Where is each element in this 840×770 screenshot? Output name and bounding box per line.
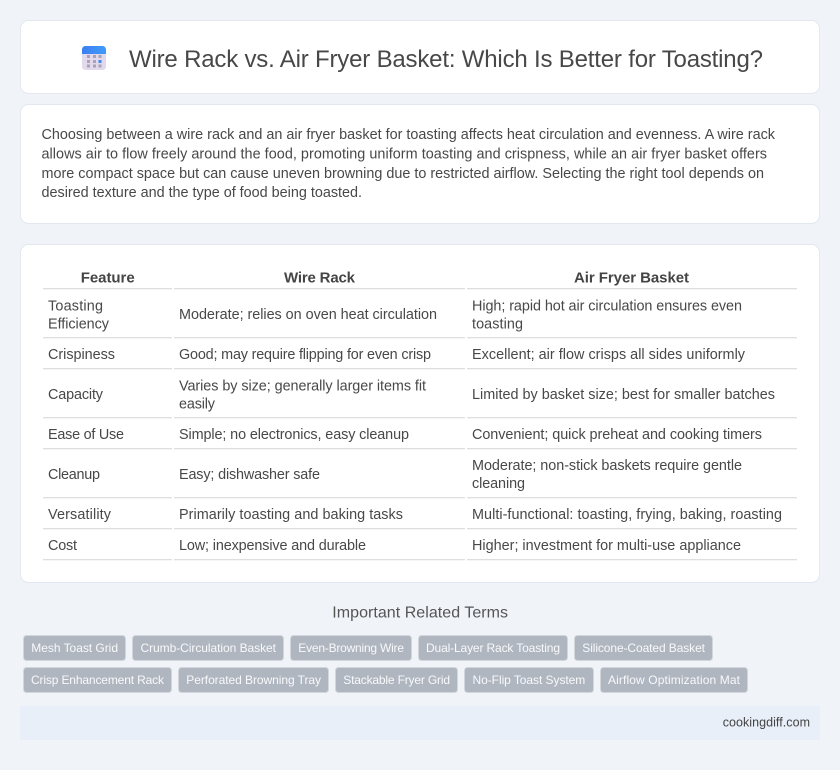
row: cleanup: cleaning bbox=[472, 476, 525, 492]
table header row: Wire Rack bbox=[284, 270, 356, 287]
row: capacity: Varies by size; generally larger items fit bbox=[179, 378, 426, 394]
tag: perforated browning tray: Perforated Browning Tray bbox=[186, 673, 321, 687]
tag: silicone-coated basket bbox=[574, 636, 712, 660]
row: cost bbox=[43, 538, 797, 560]
row: cost: Cost bbox=[48, 538, 77, 554]
row: versatility: Multi-functional: toasting, frying, baking, roasting bbox=[472, 507, 782, 523]
row: crispiness: Excellent; air flow crisps all sides uniformly bbox=[472, 347, 746, 363]
row: cleanup: Cleanup bbox=[48, 467, 100, 483]
tag: even-browning wire bbox=[290, 636, 412, 660]
related terms heading: Important Related Terms bbox=[332, 605, 508, 622]
tag: crisp enhancement rack bbox=[24, 668, 172, 692]
row: toasting efficiency bbox=[43, 298, 797, 338]
row: crispiness: Crispiness bbox=[48, 347, 115, 363]
related term tags bbox=[24, 636, 748, 692]
row: versatility: Primarily toasting and baking tasks bbox=[179, 507, 403, 523]
table header row bbox=[43, 270, 797, 289]
row: capacity: Capacity bbox=[48, 387, 104, 403]
intro text: Choosing between a wire rack and an air fryer basket for toasting affects heat circulation and evenness. A wire rack bbox=[42, 127, 776, 143]
row: ease of use: Simple; no electronics, easy cleanup bbox=[179, 427, 409, 443]
intro text: desired texture and the type of food being toasted. bbox=[42, 185, 362, 201]
row: crispiness bbox=[43, 347, 797, 369]
comparison table panel bbox=[20, 244, 820, 582]
footer bar bbox=[20, 706, 820, 740]
tag: mesh toast grid bbox=[24, 636, 126, 660]
table header row: Air Fryer Basket bbox=[574, 270, 689, 287]
row: capacity: Limited by basket size; best for smaller batches bbox=[472, 387, 775, 403]
intro text: more compact space but can cause uneven browning due to restricted airflow. Selecting the right tool depends on bbox=[42, 166, 764, 182]
intro paragraph panel bbox=[20, 104, 820, 224]
row: ease of use: Convenient; quick preheat and cooking timers bbox=[472, 427, 762, 443]
row: cleanup bbox=[43, 458, 797, 498]
icon: calendar grid bbox=[82, 46, 106, 70]
title: Wire Rack vs. Air Fryer Basket: Which Is Better for Toasting? bbox=[129, 46, 763, 73]
tag: dual-layer rack toasting bbox=[418, 636, 568, 660]
header panel bbox=[20, 20, 820, 94]
row: toasting efficiency: toasting bbox=[472, 316, 523, 332]
row: capacity: easily bbox=[179, 396, 216, 412]
tag: dual-layer rack toasting: Dual-Layer Rack Toasting bbox=[426, 641, 560, 655]
row: ease of use: Ease of Use bbox=[48, 427, 124, 443]
row: versatility: Versatility bbox=[48, 507, 112, 523]
row: toasting efficiency: High; rapid hot air circulation ensures even bbox=[472, 298, 742, 314]
tag: perforated browning tray bbox=[178, 668, 328, 692]
tag: crumb-circulation basket: Crumb-Circulation Basket bbox=[140, 641, 277, 655]
tag: no-flip toast system bbox=[464, 668, 594, 692]
tag: silicone-coated basket: Silicone-Coated Basket bbox=[582, 641, 706, 655]
tag: no-flip toast system: No-Flip Toast System bbox=[472, 673, 585, 687]
row: cost: Low; inexpensive and durable bbox=[179, 538, 366, 554]
row: crispiness: Good; may require flipping for even crisp bbox=[179, 347, 431, 363]
tag: crisp enhancement rack: Crisp Enhancement Rack bbox=[31, 673, 165, 687]
tag: crumb-circulation basket bbox=[132, 636, 284, 660]
row: cleanup: Moderate; non-stick baskets require gentle bbox=[472, 458, 742, 474]
row: ease of use bbox=[43, 427, 797, 449]
tag: mesh toast grid: Mesh Toast Grid bbox=[31, 641, 118, 655]
tag: airflow optimization mat bbox=[600, 668, 748, 692]
intro text: allows air to flow freely around the food, promoting uniform toasting and crispness, while an air fryer basket offers bbox=[42, 146, 767, 162]
row: cleanup: Easy; dishwasher safe bbox=[179, 467, 320, 483]
row: toasting efficiency: Toasting bbox=[48, 299, 103, 315]
row: toasting efficiency: Moderate; relies on oven heat circulation bbox=[179, 307, 437, 323]
footer source text: cookingdiff.com bbox=[723, 716, 810, 730]
table header row: Feature bbox=[81, 270, 135, 287]
tag: even-browning wire: Even-Browning Wire bbox=[298, 641, 404, 655]
tag: stackable fryer grid: Stackable Fryer Grid bbox=[343, 673, 450, 687]
tag: stackable fryer grid bbox=[336, 668, 458, 692]
row: capacity bbox=[43, 378, 797, 418]
tag: airflow optimization mat: Airflow Optimization Mat bbox=[608, 673, 741, 687]
row: versatility bbox=[43, 507, 797, 529]
row: cost: Higher; investment for multi-use appliance bbox=[472, 538, 741, 554]
row: toasting efficiency: Efficiency bbox=[48, 316, 110, 332]
intro text bbox=[42, 127, 776, 201]
